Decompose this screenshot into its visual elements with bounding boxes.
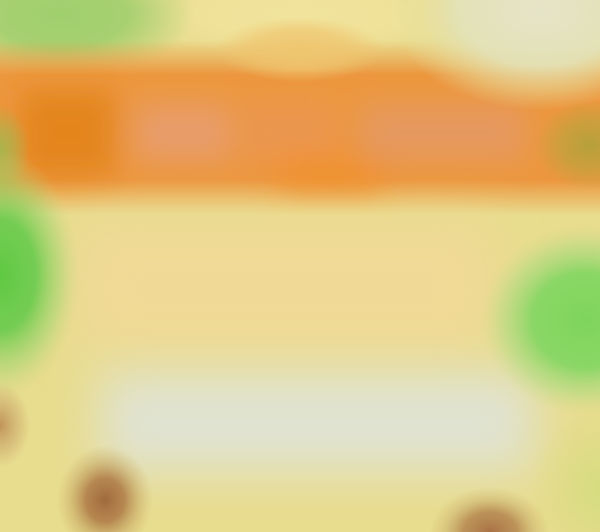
decoration: right green foliage <box>480 225 600 415</box>
panel: pale lower content box <box>100 372 535 472</box>
decoration: bottom right brown element <box>430 487 550 532</box>
decoration: banner top bump <box>215 18 385 82</box>
decoration: top right pale corner <box>390 0 600 110</box>
decoration: right olive spot <box>535 100 600 190</box>
panel: top header glow <box>130 0 470 60</box>
panel: main cream content <box>80 225 490 350</box>
panel: orange title banner <box>0 40 600 215</box>
decoration: left green foliage <box>0 150 80 400</box>
panel: banner detail blocks <box>20 90 525 190</box>
decoration: left edge brown spot <box>0 383 30 467</box>
decoration: left olive spot <box>0 105 30 195</box>
decoration: bottom right tint <box>530 410 600 532</box>
decoration: top left green <box>0 0 195 80</box>
decoration: bottom left brown element <box>57 445 153 532</box>
